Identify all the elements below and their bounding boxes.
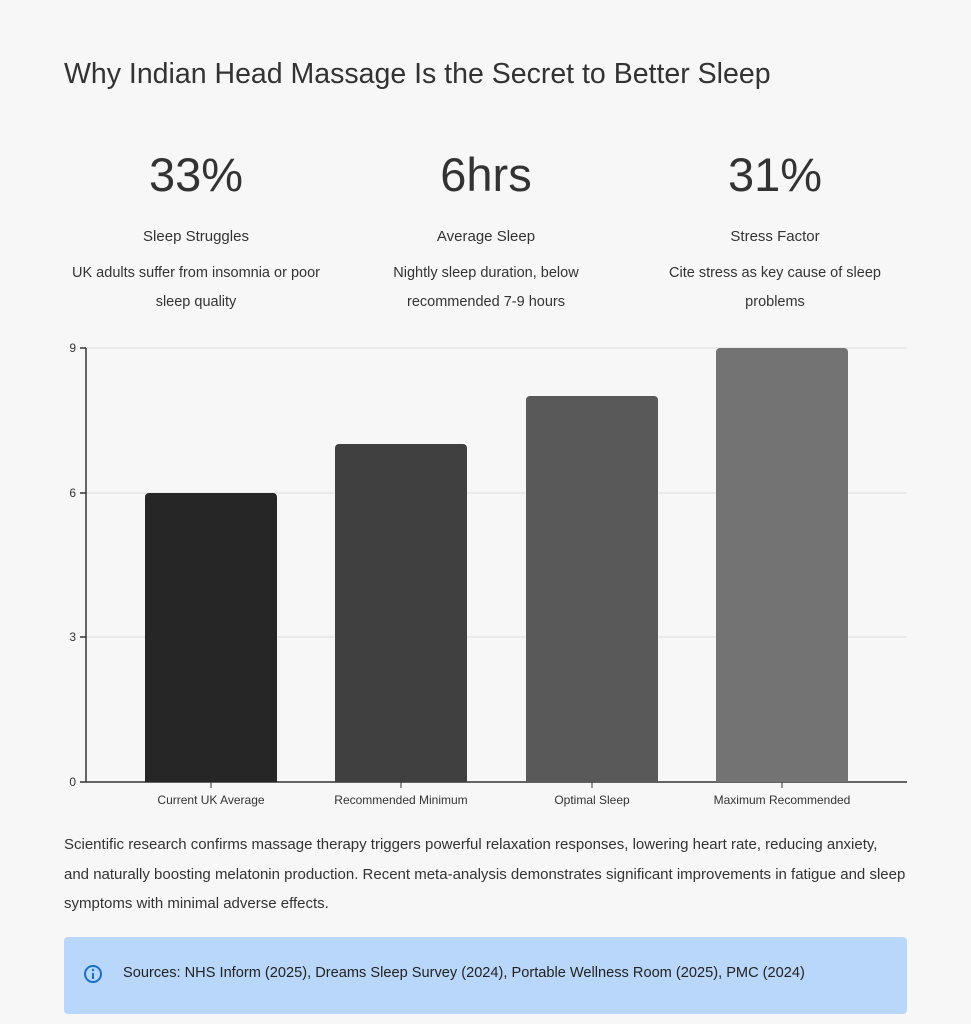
body text: and naturally boosting melatonin production. Recent meta-analysis demonstrates significant improvements in fatigue and sleep (64, 866, 905, 882)
bar chart: Maximum Recommended (714, 793, 850, 807)
stat: average sleep: Nightly sleep duration, below recommended 7-9 hours (393, 265, 579, 310)
stat: stress factor: 31% (728, 148, 822, 201)
stat: sleep struggles: Sleep Struggles (143, 228, 249, 245)
title: Why Indian Head Massage Is the Secret to Better Sleep (64, 58, 771, 90)
stat: average sleep: Average Sleep (437, 228, 535, 245)
bar chart: 0 (69, 775, 76, 789)
stat: stress factor: Cite stress as key cause of sleep problems (669, 265, 881, 310)
bar chart: Optimal Sleep (554, 793, 630, 807)
bar chart: 3 (69, 630, 76, 644)
stat: stress factor: Stress Factor (730, 228, 820, 245)
stat: stress factor (669, 148, 881, 310)
stat: sleep struggles (72, 148, 320, 310)
bar chart: 6 (69, 486, 76, 500)
stat: sleep struggles: UK adults suffer from insomnia or poor sleep quality (72, 265, 320, 310)
bar chart (69, 341, 907, 807)
stat: average sleep: 6hrs (440, 148, 532, 201)
bar chart: Recommended Minimum (334, 793, 468, 807)
stat: sleep struggles: 33% (149, 148, 243, 201)
stat: average sleep (393, 148, 579, 310)
sources callout (64, 937, 907, 1014)
body text (64, 836, 905, 912)
bar chart: Current UK Average (157, 793, 265, 807)
icon: info (84, 965, 102, 983)
bars (145, 348, 848, 782)
body text: symptoms with minimal adverse effects. (64, 895, 329, 912)
sources text: Sources: NHS Inform (2025), Dreams Sleep Survey (2024), Portable Wellness Room (2025), PMC (2024) (123, 965, 805, 981)
body text: Scientific research confirms massage therapy triggers powerful relaxation responses, lowering heart rate, reducing anxiety, (64, 836, 877, 853)
bar chart: 9 (69, 341, 76, 355)
